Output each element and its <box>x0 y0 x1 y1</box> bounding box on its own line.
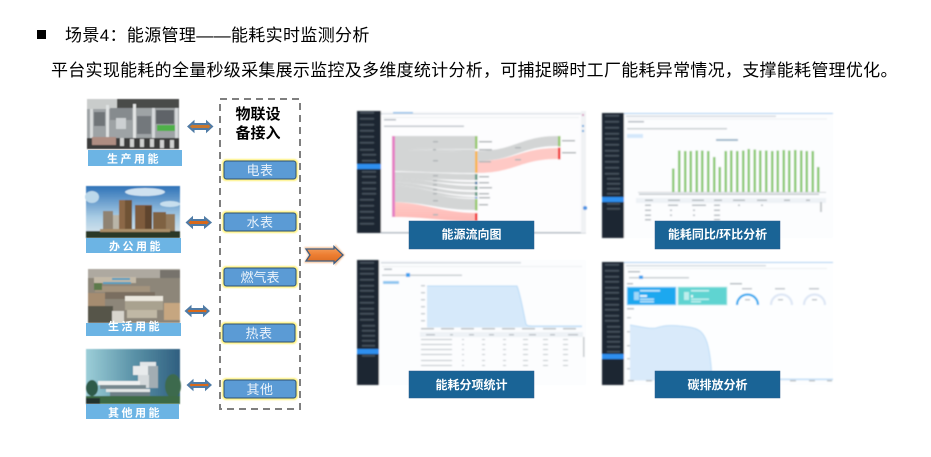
label: itemised statistics: 能耗分项统计 <box>435 377 508 392</box>
label: itemised statistics <box>409 371 534 398</box>
label: 生产用能: 生产用能 <box>107 152 161 166</box>
photo: aerial housing <box>88 269 180 323</box>
area chart <box>627 317 833 382</box>
heading: IoT devices: 备接入 <box>235 124 281 142</box>
title: 场景4：能源管理——能耗实时监测分析 <box>65 26 370 45</box>
panel: production energy <box>87 99 182 166</box>
photo: modern building <box>86 349 181 404</box>
data table <box>420 332 584 366</box>
label: carbon analysis: 碳排放分析 <box>687 377 748 392</box>
button: water meter: 水表 <box>246 215 274 230</box>
panel: other energy <box>86 349 181 420</box>
double arrow: production <box>188 122 212 131</box>
sankey chart <box>392 136 576 221</box>
gauge: third <box>804 294 825 305</box>
sidebar <box>357 260 379 385</box>
double arrow: other <box>188 381 210 389</box>
label: energy flow: 能源流向图 <box>441 226 502 242</box>
panel: living energy <box>86 269 181 336</box>
panel: IoT device access <box>220 99 300 409</box>
button: heat meter <box>221 322 297 344</box>
panel: carbon emission screenshot <box>602 262 833 398</box>
photo: towers <box>85 186 180 238</box>
label: 办公用能: 办公用能 <box>109 239 163 253</box>
button: electric meter: 电表 <box>246 163 274 178</box>
photo: factory <box>87 99 179 149</box>
double arrow: office <box>187 218 210 227</box>
sidebar <box>357 111 381 233</box>
button: other meter <box>222 378 298 400</box>
button: water meter <box>222 211 298 233</box>
button: other meter: 其他 <box>246 382 274 397</box>
subtitle text: 平台实现能耗的全量秒级采集展示监控及多维度统计分析，可捕捉瞬时工厂能耗异常情况，支撑能耗管理优化。 <box>51 61 898 80</box>
label: carbon analysis <box>655 371 780 398</box>
button: gas meter <box>222 266 298 288</box>
card: teal <box>678 287 727 305</box>
card: blue <box>627 287 676 305</box>
bar chart <box>638 149 826 195</box>
button: gas meter: 燃气表 <box>240 270 280 285</box>
area chart <box>421 285 582 330</box>
gauge: active <box>737 294 758 305</box>
big arrow <box>304 244 345 266</box>
sidebar <box>602 262 624 385</box>
button: electric meter <box>222 159 298 181</box>
heading: IoT devices: 物联设 <box>235 105 281 123</box>
label: 其他用能: 其他用能 <box>108 406 162 420</box>
panel: energy flow screenshot <box>357 111 587 249</box>
gauge: second <box>771 294 792 305</box>
double arrow: living <box>186 307 208 315</box>
label: 生活用能: 生活用能 <box>108 319 162 333</box>
label: comparison analysis <box>655 221 780 249</box>
panel: itemised statistics screenshot <box>357 260 586 398</box>
button: heat meter: 热表 <box>245 326 273 341</box>
label: comparison analysis: 能耗同比/环比分析 <box>668 226 767 242</box>
panel: year-on-year analysis screenshot <box>602 113 833 249</box>
sidebar <box>602 113 624 238</box>
panel: office energy <box>85 186 181 253</box>
data table <box>636 198 826 220</box>
heading: IoT devices <box>235 105 281 142</box>
label: energy flow <box>409 221 534 249</box>
